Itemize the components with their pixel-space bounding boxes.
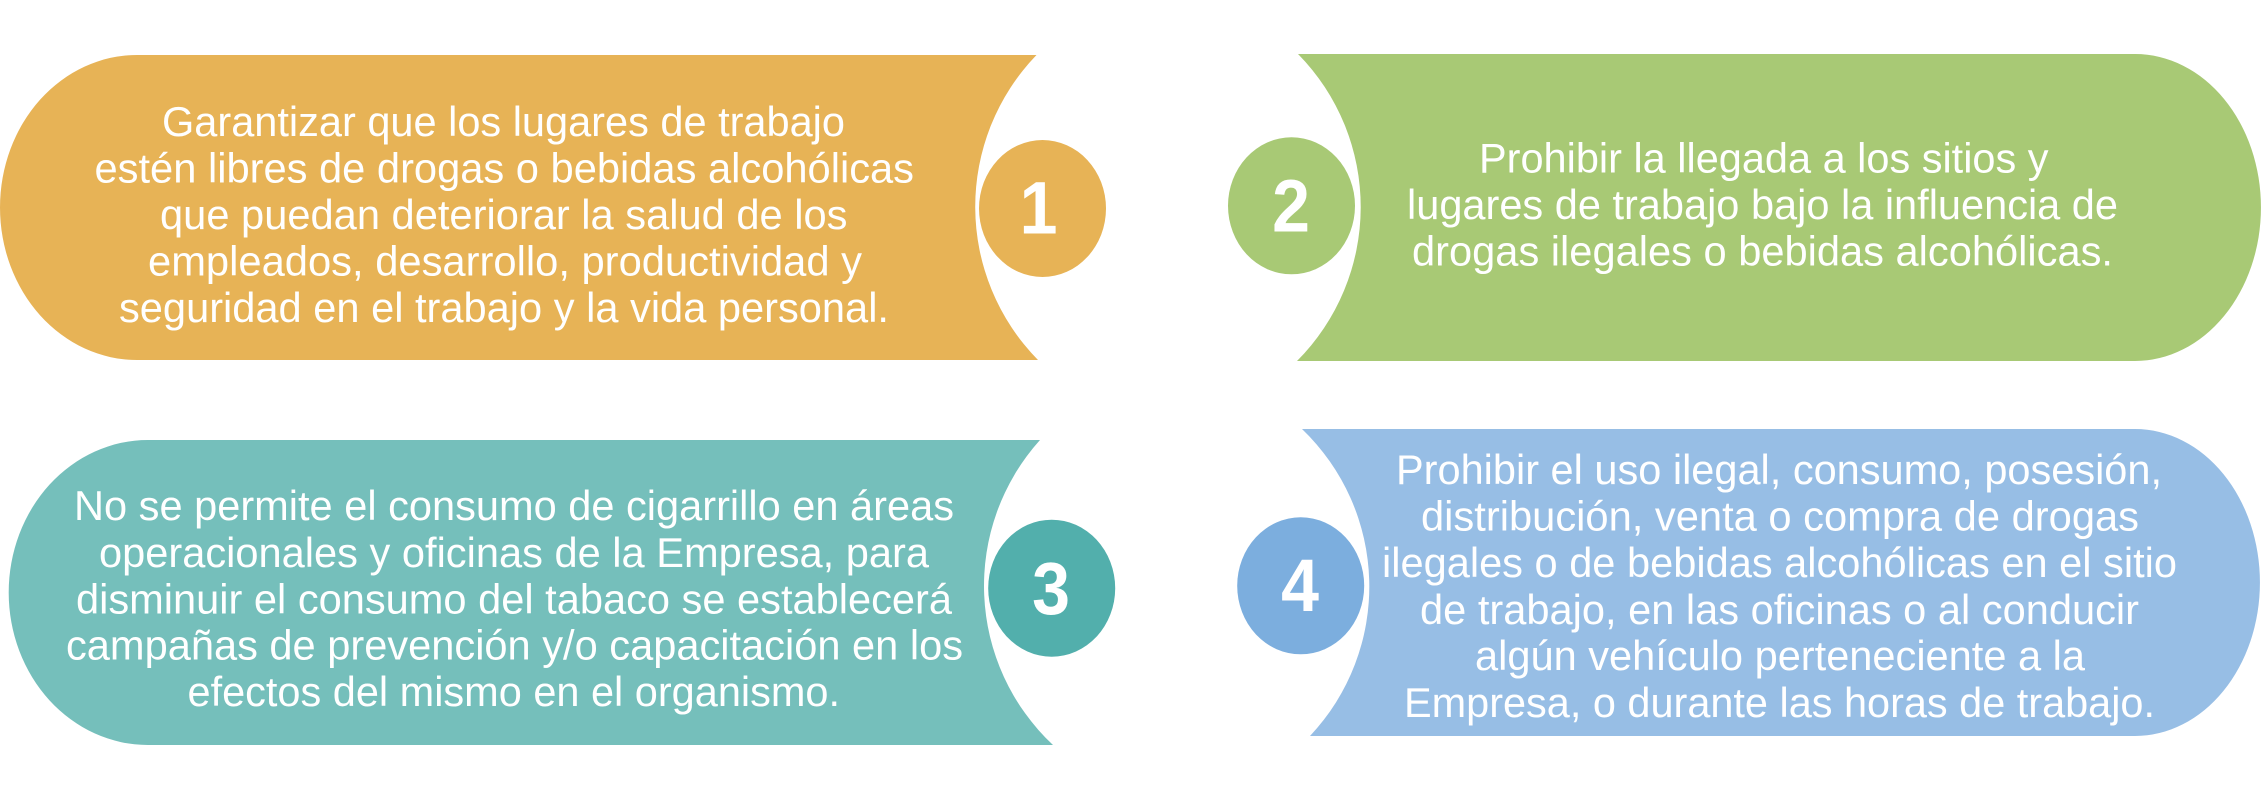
number badge 4: 4 [1281, 545, 1319, 628]
panel 1 text: seguridad en el trabajo y la vida personal. [119, 284, 889, 331]
panel 3: teal [9, 440, 1115, 745]
panel 2 text: lugares de trabajo bajo la influencia de [1407, 181, 2118, 228]
panel 1 text: empleados, desarrollo, productividad y [148, 238, 862, 284]
panel 4 text: Prohibir el uso ilegal, consumo, posesión, [1396, 446, 2162, 493]
panel 2 shape [1297, 54, 2261, 361]
panel 1 text [94, 98, 914, 331]
panel 3 text: operacionales y oficinas de la Empresa, para [99, 529, 930, 576]
number badge 2 [1228, 137, 1355, 274]
panel 2: green [1228, 54, 2261, 361]
panel 4: blue [1237, 429, 2260, 736]
panel 4 text: algún vehículo perteneciente a la [1475, 632, 2086, 679]
panel 4 text: ilegales o de bebidas alcohólicas en el sitio [1382, 539, 2177, 586]
panel 1: orange [0, 55, 1106, 360]
panel 3 text: efectos del mismo en el organismo. [188, 668, 840, 715]
panel 4 shape [1302, 429, 2260, 736]
panel 1 text: Garantizar que los lugares de trabajo [162, 98, 845, 145]
panel 2 text [1407, 135, 2118, 275]
panel 4 text: Empresa, o durante las horas de trabajo. [1404, 679, 2155, 726]
panel 2 text: drogas ilegales o bebidas alcohólicas. [1412, 228, 2113, 275]
panel 3 text: No se permite el consumo de cigarrillo en áreas [74, 482, 954, 529]
number badge 1 [979, 140, 1106, 277]
panel 2 text: Prohibir la llegada a los sitios y [1479, 135, 2048, 182]
panel 3 shape [9, 440, 1053, 745]
panel 4 text [1382, 446, 2177, 726]
panel 4 text: distribución, venta o compra de drogas [1421, 493, 2139, 540]
panel 4 text: de trabajo, en las oficinas o al conducir [1420, 586, 2139, 633]
number badge 1: 1 [1020, 168, 1057, 250]
panel 3 text: disminuir el consumo del tabaco se establecerá [76, 576, 953, 623]
panel 1 text: que puedan deteriorar la salud de los [160, 191, 848, 238]
panel 1 shape [0, 55, 1038, 360]
panel 1 text: estén libres de drogas o bebidas alcohólicas [94, 144, 914, 192]
number badge 3: 3 [1032, 548, 1070, 631]
number badge 4 [1237, 517, 1364, 654]
number badge 2: 2 [1272, 166, 1310, 248]
number badge 3 [988, 520, 1115, 657]
panel 3 text [66, 482, 963, 715]
panel 3 text: campañas de prevención y/o capacitación en los [66, 622, 963, 669]
